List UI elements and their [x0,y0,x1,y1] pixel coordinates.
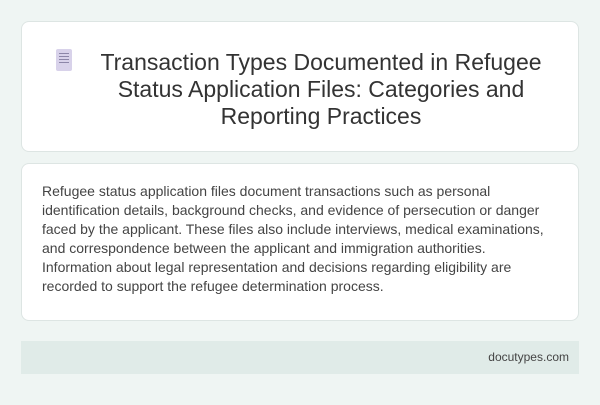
text block: Refugee status application files document transactions such as personal identification details, background checks, and evidence of persecution or danger faced by the applicant. These files also include interviews, medical examinations, and correspondence between the applicant and immigration authorities. Information about legal representation and decisions regarding eligibility are recorded to support the refugee determination process. [42,183,544,294]
title: Transaction Types Documented in Refugee Status Application Files: Categories and Reporting Practices [100,49,542,129]
source label: docutypes.com [488,350,569,364]
icon: document [56,49,72,71]
panel: title card [21,21,579,152]
panel: description [21,163,579,321]
footer [21,341,579,374]
